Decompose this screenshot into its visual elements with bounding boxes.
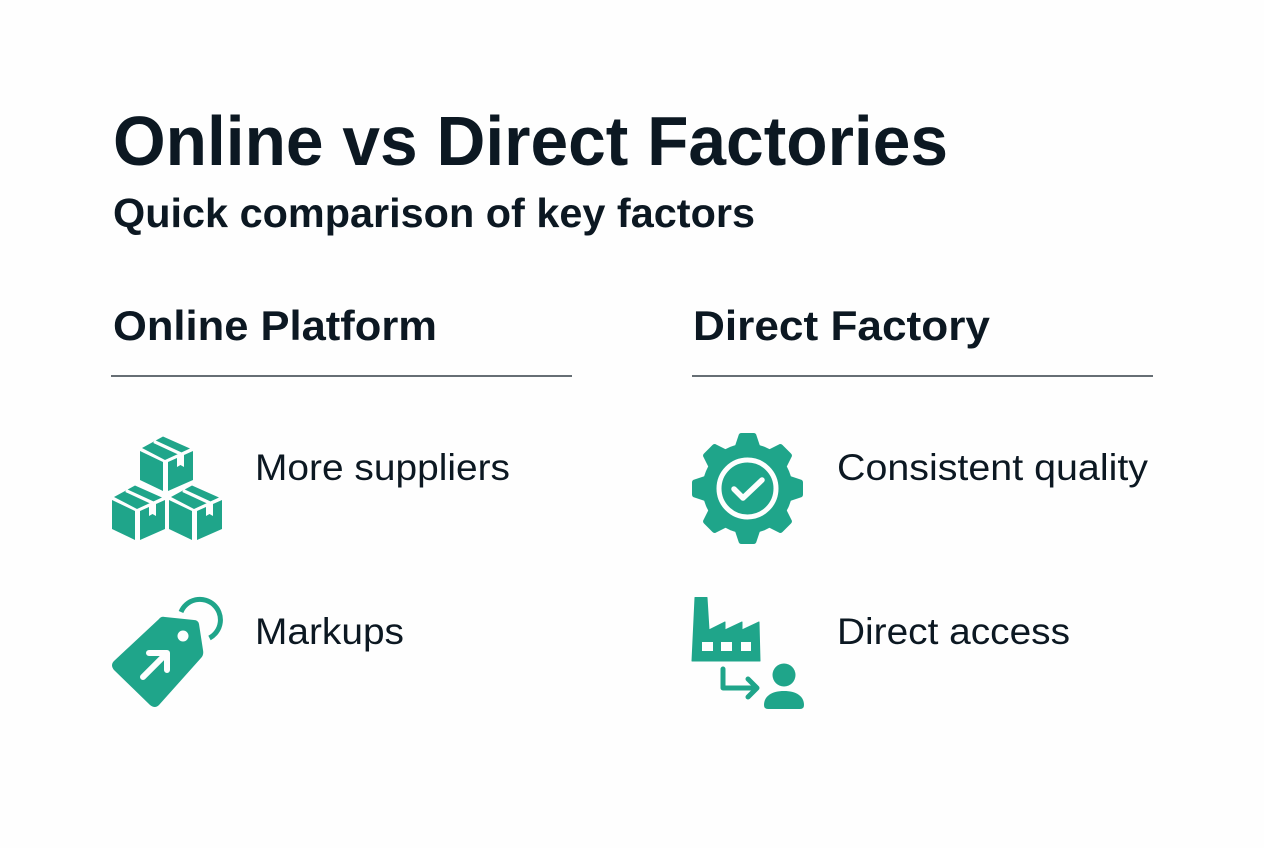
label: consistent quality: Consistent quality (837, 447, 1149, 488)
title: Online vs Direct Factories (113, 102, 948, 180)
subtitle: Quick comparison of key factors (113, 190, 755, 236)
label: direct access: Direct access (837, 611, 1070, 652)
heading: online platform: Online Platform (113, 302, 437, 349)
label: more suppliers: More suppliers (255, 447, 510, 488)
panel: direct factory (692, 302, 1153, 709)
icon: price tag (112, 599, 220, 707)
icon: gear with check (692, 433, 803, 544)
icon: factory to person (692, 598, 804, 709)
panel: online platform (111, 302, 572, 707)
icon: stacked boxes (112, 436, 222, 540)
label: markups: Markups (255, 611, 404, 652)
heading: direct factory: Direct Factory (693, 302, 991, 349)
